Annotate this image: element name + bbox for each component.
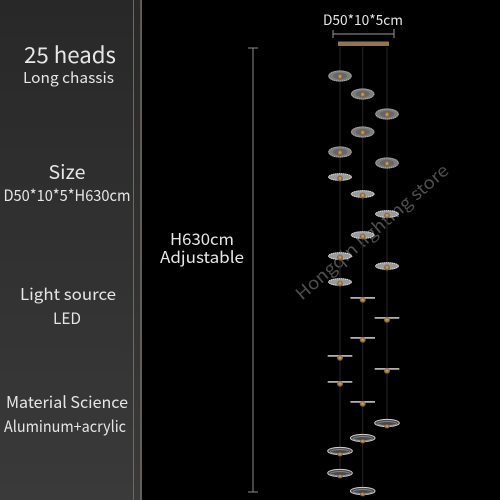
lamp heads: [328, 70, 399, 496]
height dimension line: [248, 48, 258, 492]
label: height: H630cm: [170, 226, 234, 250]
heading: light source: Light source: [20, 281, 116, 305]
chandelier: [328, 42, 399, 496]
label: adjustable: Adjustable: [160, 244, 244, 268]
text: size value: D50*10*5*H630cm: [4, 184, 130, 206]
suspension wires: [340, 47, 387, 491]
label: width dimension: D50*10*5cm: [323, 10, 403, 30]
text: LED: LED: [53, 307, 81, 329]
chassis bar: [338, 42, 389, 46]
heading: 25 heads: 25 heads: [24, 38, 116, 70]
heading: size: Size: [48, 158, 86, 185]
text: long chassis: Long chassis: [23, 67, 114, 88]
width dimension line: [333, 29, 394, 38]
watermark: Hongqin lighting store: [289, 157, 453, 305]
panel: specifications: [0, 0, 142, 500]
text: material value: Aluminum+acrylic: [4, 415, 126, 437]
heading: material science: Material Science: [6, 389, 128, 413]
